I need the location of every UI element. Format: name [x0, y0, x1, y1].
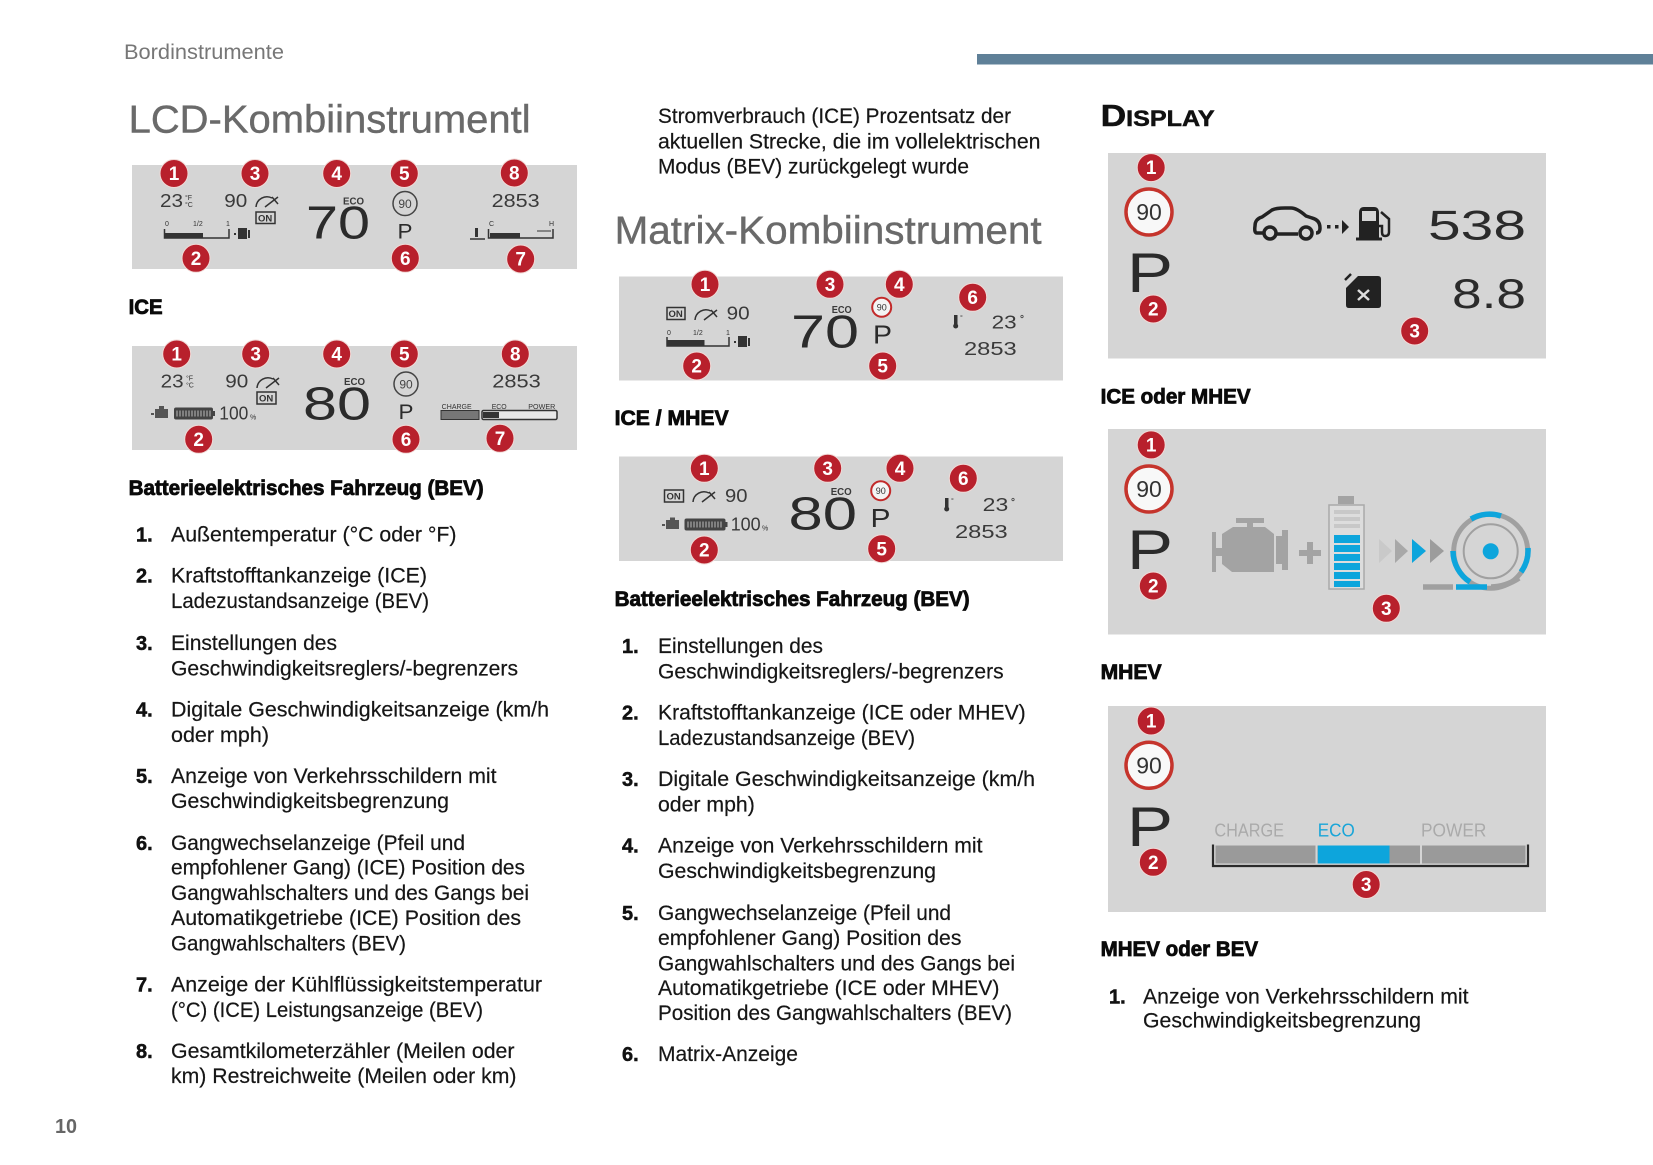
traffic sign: 90	[399, 378, 413, 392]
heading: ICE oder MHEV: ICE oder MHEV	[1101, 386, 1251, 408]
charge percent: %	[250, 414, 256, 422]
item 8: km) Restreichweite (Meilen oder km)	[171, 1065, 516, 1088]
list: LCD items	[136, 524, 549, 1088]
badge 6	[959, 283, 987, 311]
temperature	[983, 495, 1015, 515]
fuel gauge	[667, 330, 730, 346]
item 8: 8.	[136, 1041, 153, 1063]
gear P: P	[870, 503, 890, 533]
item 2: 2.	[136, 566, 153, 588]
text block: continued: Stromverbrauch (ICE) Prozentsatz der	[658, 105, 1011, 128]
traffic sign	[872, 298, 891, 317]
badge 2: 2	[1148, 300, 1159, 321]
badge 1: 1	[1146, 158, 1157, 179]
traffic sign: 90	[876, 486, 886, 496]
header label: Bordinstrumente	[124, 41, 284, 64]
item 3: Geschwindigkeitsreglers/-begrenzers	[171, 658, 518, 680]
heading: Matrix BEV: Batterieelektrisches Fahrzeug (BEV)	[615, 588, 970, 611]
badge 6	[391, 244, 419, 272]
item 3: 3.	[622, 769, 639, 791]
badge 1: 1	[699, 459, 710, 480]
item 6	[136, 832, 529, 956]
power bar: CHARGE	[442, 404, 472, 411]
badge 8	[501, 340, 529, 368]
badge 1: 1	[1146, 435, 1157, 456]
title: LCD: LCD-Kombiinstrumentl	[129, 98, 531, 142]
badge 2: 2	[193, 430, 204, 451]
odometer: 2853	[964, 339, 1017, 359]
item 5: Gangwahlschalters und des Gangs bei	[658, 952, 1015, 976]
outside temperature: 23	[160, 191, 183, 211]
item 5	[622, 902, 1015, 1025]
temperature: °	[1011, 497, 1015, 508]
badge 1	[1137, 707, 1165, 735]
icon: engine	[1212, 518, 1288, 572]
item 6: 6.	[136, 833, 153, 855]
icon: flow arrows	[1379, 539, 1444, 563]
text block: continued: Modus (BEV) zurückgelegt wurde	[658, 156, 969, 178]
item 5: 5.	[136, 766, 153, 788]
temperature: 23	[983, 495, 1008, 515]
item 1: Einstellungen des	[658, 635, 823, 658]
item 2	[622, 702, 1026, 750]
heading: BEV: Batterieelektrisches Fahrzeug (BEV)	[129, 477, 484, 500]
item 1: Außentemperatur (°C oder °F)	[171, 524, 456, 546]
item 8	[136, 1040, 516, 1088]
item 7: 7.	[136, 974, 153, 996]
gear P: P	[398, 220, 412, 244]
label: ECO: ECO	[1318, 820, 1355, 840]
badge 3: 3	[1381, 599, 1392, 620]
item 3	[136, 632, 518, 680]
badge 2: 2	[1148, 577, 1159, 598]
traffic sign: 90	[398, 197, 412, 211]
ON indicator: ON	[666, 492, 681, 502]
icon: range arrow	[1327, 220, 1349, 234]
item 2: 2.	[622, 702, 639, 724]
panel: LCD BEV	[132, 340, 577, 453]
heading: MHEV: MHEV	[1101, 661, 1162, 684]
list: display item: Anzeige von Verkehrsschildern mit	[1143, 986, 1469, 1008]
heading: ICE / MHEV: ICE / MHEV	[615, 407, 729, 430]
badge 2	[690, 536, 718, 564]
badge 3	[1352, 870, 1380, 898]
thermometer: °	[951, 497, 954, 505]
item 6: Gangwahlschalters (BEV)	[171, 932, 406, 956]
item 5: Automatikgetriebe (ICE oder MHEV)	[658, 977, 999, 1000]
icon: fuel pump	[1356, 207, 1389, 240]
badge 7	[507, 245, 535, 273]
item 4: Anzeige von Verkehrsschildern mit	[658, 834, 983, 858]
panel: LCD ICE	[132, 159, 577, 273]
ON indicator: ON	[258, 214, 272, 224]
power bar: ECO	[492, 404, 507, 411]
outside temperature: °F	[186, 374, 193, 382]
coolant gauge: C	[489, 221, 494, 228]
ON indicator	[667, 308, 685, 320]
fuel gauge: 1/2	[693, 330, 703, 337]
traffic sign	[1126, 466, 1172, 512]
power bar	[441, 404, 557, 420]
list: Matrix items	[622, 635, 1035, 1066]
item 4	[622, 834, 983, 883]
item 2	[136, 564, 429, 613]
badge 3	[1372, 594, 1400, 622]
item 3: oder mph)	[658, 794, 755, 816]
item 7: (°C) (ICE) Leistungsanzeige (BEV)	[171, 999, 483, 1022]
odometer: 2853	[955, 522, 1008, 542]
fuel gauge: 0	[667, 330, 671, 337]
item 7: Anzeige der Kühlflüssigkeitstemperatur	[171, 974, 542, 996]
list: display item	[1109, 986, 1469, 1032]
item 5: Position des Gangwahlschalters (BEV)	[658, 1002, 1012, 1025]
traffic sign	[393, 192, 417, 216]
gear P: P	[1127, 518, 1173, 581]
outside temperature: °C	[185, 201, 193, 209]
fuel gauge: 1	[226, 221, 230, 228]
badge 4	[323, 160, 351, 188]
badge 6	[949, 464, 977, 492]
badge 4: 4	[895, 459, 906, 480]
ECO label: ECO	[831, 487, 852, 498]
badge 1	[690, 454, 718, 482]
badge 5	[390, 340, 418, 368]
ON indicator	[256, 212, 275, 224]
icon: gauge	[256, 197, 278, 207]
panel: Matrix BEV	[619, 454, 1063, 564]
item 3: 3.	[136, 633, 153, 655]
speed 80: 80	[303, 378, 371, 430]
badge 4: 4	[331, 164, 342, 185]
badge 3	[814, 454, 842, 482]
badge 7: 7	[495, 429, 505, 450]
panel: display power bar	[1108, 706, 1546, 912]
badge 5: 5	[877, 357, 888, 378]
badge 6: 6	[958, 469, 969, 490]
ECO label: ECO	[832, 305, 852, 316]
gear P: P	[1127, 795, 1173, 858]
item 6: 6.	[622, 1044, 639, 1066]
badge 2	[182, 244, 210, 272]
badge 6: 6	[400, 249, 411, 270]
badge 3: 3	[822, 459, 833, 480]
badge 4	[323, 340, 351, 368]
icon: fuel pump	[234, 228, 250, 239]
traffic sign	[1126, 742, 1172, 788]
badge 2: 2	[1148, 853, 1159, 874]
item 5: Anzeige von Verkehrsschildern mit	[171, 765, 497, 788]
badge 4	[886, 454, 914, 482]
badge 6	[392, 425, 420, 453]
item 8: Gesamtkilometerzähler (Meilen oder	[171, 1040, 514, 1063]
badge 1	[163, 340, 191, 368]
list: display item: Geschwindigkeitsbegrenzung	[1143, 1010, 1421, 1032]
badge 4: 4	[894, 275, 905, 296]
temperature: °	[1020, 314, 1024, 325]
page number: 10	[55, 1116, 77, 1138]
icon: car	[1255, 208, 1320, 239]
badge 2	[185, 425, 213, 453]
outside temperature: °C	[186, 382, 194, 390]
charge percent: 100	[731, 515, 761, 535]
badge 8: 8	[509, 164, 520, 185]
ON indicator: ON	[668, 309, 683, 320]
coolant gauge: H	[549, 221, 554, 228]
badge 3: 3	[825, 275, 835, 296]
item 4: oder mph)	[171, 724, 269, 747]
panel: display MHEV	[1108, 429, 1546, 634]
icon: gauge	[693, 492, 715, 502]
fuel gauge: 0	[165, 221, 169, 228]
icon: gauge	[257, 378, 279, 388]
badge 6: 6	[401, 430, 411, 451]
item 3: Digitale Geschwindigkeitsanzeige (km/h	[658, 768, 1035, 791]
badge 8: 8	[510, 345, 521, 366]
badge 1: 1	[700, 275, 711, 296]
item 4: Digitale Geschwindigkeitsanzeige (km/h	[171, 698, 549, 722]
ECO label: ECO	[344, 377, 365, 388]
panel: display ICE or MHEV	[1108, 153, 1546, 358]
list: display item: 1.	[1109, 986, 1126, 1008]
fuel gauge: 1	[726, 330, 730, 337]
item 2: Ladezustandsanzeige (BEV)	[658, 727, 915, 750]
badge 1: 1	[169, 164, 180, 185]
badge 1	[160, 160, 188, 188]
badge 4: 4	[331, 345, 342, 366]
temperature: 23	[992, 312, 1017, 332]
badge 4	[885, 270, 913, 298]
badge 3: 3	[250, 345, 261, 366]
item 4: 4.	[136, 700, 153, 722]
item 3: Einstellungen des	[171, 632, 337, 655]
traffic sign	[1126, 189, 1172, 235]
item 5	[136, 765, 497, 813]
power bar	[1213, 844, 1528, 866]
badge 1: 1	[1146, 712, 1157, 733]
text block: continued: aktuellen Strecke, die im vollelektrischen	[658, 130, 1040, 154]
badge 1	[691, 270, 719, 298]
item 4	[136, 698, 549, 747]
odometer: 2853	[492, 191, 540, 211]
charge percent: 100	[219, 404, 248, 424]
heading: Display: Display	[1101, 98, 1215, 133]
heading: MHEV oder BEV: MHEV oder BEV	[1101, 938, 1258, 961]
badge 5: 5	[399, 345, 410, 366]
gear P: P	[1127, 241, 1173, 304]
badge 2: 2	[699, 541, 710, 562]
badge 5	[869, 352, 897, 380]
traffic sign: 90	[877, 302, 887, 312]
outside temperature	[160, 191, 193, 211]
item 4: 4.	[622, 836, 639, 858]
item 2: Kraftstofftankanzeige (ICE oder MHEV)	[658, 702, 1026, 724]
badge 7	[486, 424, 514, 452]
badge 8	[500, 159, 528, 187]
badge 7: 7	[515, 250, 526, 271]
title: Matrix: Matrix-Kombiinstrument	[615, 210, 1042, 252]
speed 70: 70	[306, 196, 370, 248]
item 1: 1.	[622, 636, 639, 658]
traffic sign	[871, 481, 890, 500]
badge 5: 5	[876, 539, 887, 560]
badge 1: 1	[171, 345, 182, 366]
badge 2	[1139, 848, 1167, 876]
icon: battery plug	[151, 406, 168, 418]
badge 3: 3	[1409, 322, 1420, 343]
badge 1	[1137, 154, 1165, 182]
temperature	[992, 312, 1024, 332]
outside temperature: 23	[161, 372, 184, 392]
power bar: POWER	[528, 404, 555, 411]
badge 2	[1139, 295, 1167, 323]
thermometer: °	[960, 314, 963, 322]
speed 70: 70	[791, 306, 859, 358]
item 1: 1.	[136, 524, 153, 546]
item 5: 5.	[622, 903, 639, 925]
badge 5	[868, 535, 896, 563]
gear P: P	[398, 401, 414, 424]
badge 3	[816, 270, 844, 298]
traffic sign	[394, 372, 418, 396]
gear P: P	[873, 320, 892, 350]
item 1	[622, 635, 1004, 684]
icon: battery	[1329, 496, 1364, 589]
odometer: 2853	[492, 372, 541, 392]
item 4: Geschwindigkeitsbegrenzung	[658, 860, 936, 883]
ON indicator	[664, 490, 684, 502]
icon: gauge	[695, 310, 717, 320]
cruise speed: 90	[225, 372, 248, 392]
badge 2	[1139, 572, 1167, 600]
text block: continued	[658, 105, 1040, 178]
item 6: Automatikgetriebe (ICE) Position des	[171, 907, 521, 930]
badge 5: 5	[399, 164, 410, 185]
item 6: empfohlener Gang) (ICE) Position des	[171, 856, 525, 880]
badge 3	[242, 340, 270, 368]
item 7	[136, 974, 542, 1022]
item 2: Ladezustandsanzeige (BEV)	[171, 590, 429, 613]
coolant gauge	[470, 221, 554, 239]
badge 2: 2	[691, 357, 702, 378]
traffic sign: 90	[1136, 752, 1162, 778]
cruise speed: 90	[725, 486, 748, 506]
badge 3	[241, 160, 269, 188]
cruise speed: 90	[224, 191, 247, 211]
icon: plus	[1299, 542, 1321, 564]
cruise speed: 90	[727, 304, 750, 324]
label: POWER: POWER	[1421, 820, 1486, 840]
item 6: Matrix-Anzeige	[658, 1043, 798, 1066]
battery gauge	[684, 518, 728, 530]
charge percent: %	[762, 526, 768, 533]
item 6: Gangwahlschalters und des Gangs bei	[171, 882, 529, 905]
badge 3: 3	[1361, 875, 1371, 896]
icon: jerry can	[1345, 274, 1381, 308]
badge 6: 6	[967, 288, 978, 309]
icon: wheel	[1423, 514, 1528, 588]
consumption value: 8.8	[1452, 270, 1526, 317]
thermometer	[953, 314, 963, 328]
icon: battery plug	[662, 518, 679, 529]
outside temperature	[161, 372, 194, 392]
badge 5	[390, 160, 418, 188]
badge 2	[683, 352, 711, 380]
ON indicator	[257, 392, 276, 404]
speed 80: 80	[788, 488, 857, 540]
badge 1	[1137, 431, 1165, 459]
header bar	[977, 54, 1653, 64]
item 2: Kraftstofftankanzeige (ICE)	[171, 564, 427, 588]
badge 3	[1401, 317, 1429, 345]
traffic sign: 90	[1136, 476, 1162, 502]
item 5: Geschwindigkeitsbegrenzung	[171, 790, 449, 813]
range value: 538	[1428, 202, 1526, 248]
badge 3: 3	[250, 164, 260, 185]
fuel gauge: 1/2	[193, 221, 203, 228]
thermometer	[944, 497, 954, 512]
ECO label: ECO	[343, 196, 364, 208]
fuel gauge	[164, 221, 230, 238]
item 5: empfohlener Gang) Position des	[658, 927, 961, 950]
traffic sign: 90	[1136, 199, 1162, 225]
item 3	[622, 768, 1035, 816]
item 1: Geschwindigkeitsreglers/-begrenzers	[658, 660, 1004, 684]
label: CHARGE: CHARGE	[1214, 820, 1284, 840]
outside temperature: °F	[185, 194, 192, 202]
badge 2: 2	[191, 249, 201, 270]
ON indicator: ON	[259, 394, 273, 404]
icon: fuel pump	[734, 336, 750, 347]
panel: Matrix ICE/MHEV	[619, 270, 1063, 380]
item 6: Gangwechselanzeige (Pfeil und	[171, 832, 465, 855]
item 5: Gangwechselanzeige (Pfeil und	[658, 902, 951, 925]
battery gauge	[174, 408, 215, 420]
heading: ICE: ICE	[129, 296, 163, 319]
